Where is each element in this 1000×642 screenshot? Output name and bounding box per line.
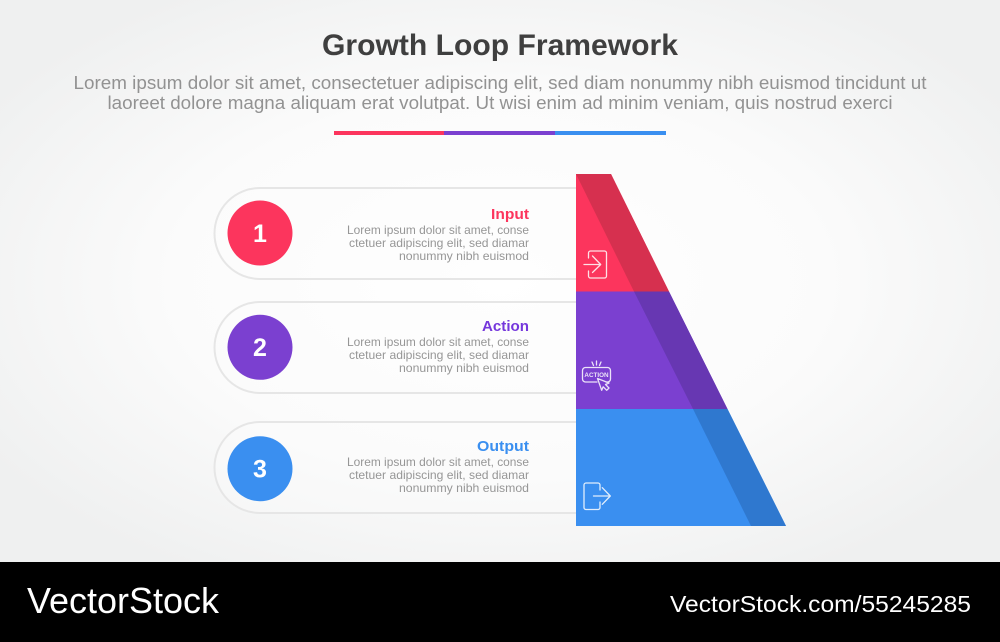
shaded band: output (693, 409, 786, 526)
description: output (347, 455, 529, 495)
icon: action: ACTION (584, 372, 609, 379)
heading: output: Output (477, 438, 529, 455)
description: action: Lorem ipsum dolor sit amet, conse (347, 335, 529, 349)
icon: output (584, 483, 610, 510)
heading: action: Action (482, 318, 529, 335)
segment: output (576, 409, 786, 526)
subtitle: laoreet dolore magna aliquam erat volutpat. Ut wisi enim ad minim veniam, quis nostrud exerci (108, 93, 892, 113)
number badge 2: 2 (253, 334, 267, 362)
number badge 3 (228, 436, 292, 501)
panel: output (214, 422, 576, 513)
description: output: nonummy nibh euismod (399, 481, 529, 495)
footer bar (0, 562, 1000, 642)
title: Growth Loop Framework (322, 29, 678, 62)
segment: action (576, 292, 728, 409)
subtitle: Lorem ipsum dolor sit amet, consectetuer adipiscing elit, sed diam nonummy nibh euismod tincidunt ut (74, 73, 926, 93)
description: input: nonummy nibh euismod (399, 249, 529, 263)
description: output: ctetuer adipiscing elit, sed diamar (349, 468, 529, 482)
description: input: ctetuer adipiscing elit, sed diamar (349, 236, 529, 250)
footer url: VectorStock.com/55245285 (670, 591, 971, 617)
shaded band: input (576, 174, 669, 292)
description: action: nonummy nibh euismod (399, 361, 529, 375)
description: input (347, 223, 529, 263)
panel: action (215, 302, 576, 393)
trapezoid diagram (576, 174, 786, 526)
number badge 3: 3 (253, 456, 267, 484)
panel: input (214, 188, 576, 279)
shaded band: action (634, 292, 728, 409)
icon: action (582, 361, 610, 390)
heading: input: Input (491, 206, 529, 223)
icon: input (584, 251, 606, 278)
segment: input (576, 174, 669, 292)
description: input: Lorem ipsum dolor sit amet, conse (347, 223, 529, 237)
title divider (334, 131, 666, 135)
pill outline 1 (214, 188, 576, 279)
number badge 1: 1 (253, 220, 267, 248)
description: action: ctetuer adipiscing elit, sed diamar (349, 348, 529, 362)
description: action (347, 335, 529, 375)
pill outline 2 (215, 302, 576, 393)
description: output: Lorem ipsum dolor sit amet, conse (347, 455, 529, 469)
subtitle (74, 73, 926, 113)
footer logo: VectorStock (27, 580, 220, 621)
number badge 1 (228, 200, 292, 266)
pill outline 3 (214, 422, 576, 513)
number badge 2 (228, 315, 292, 380)
